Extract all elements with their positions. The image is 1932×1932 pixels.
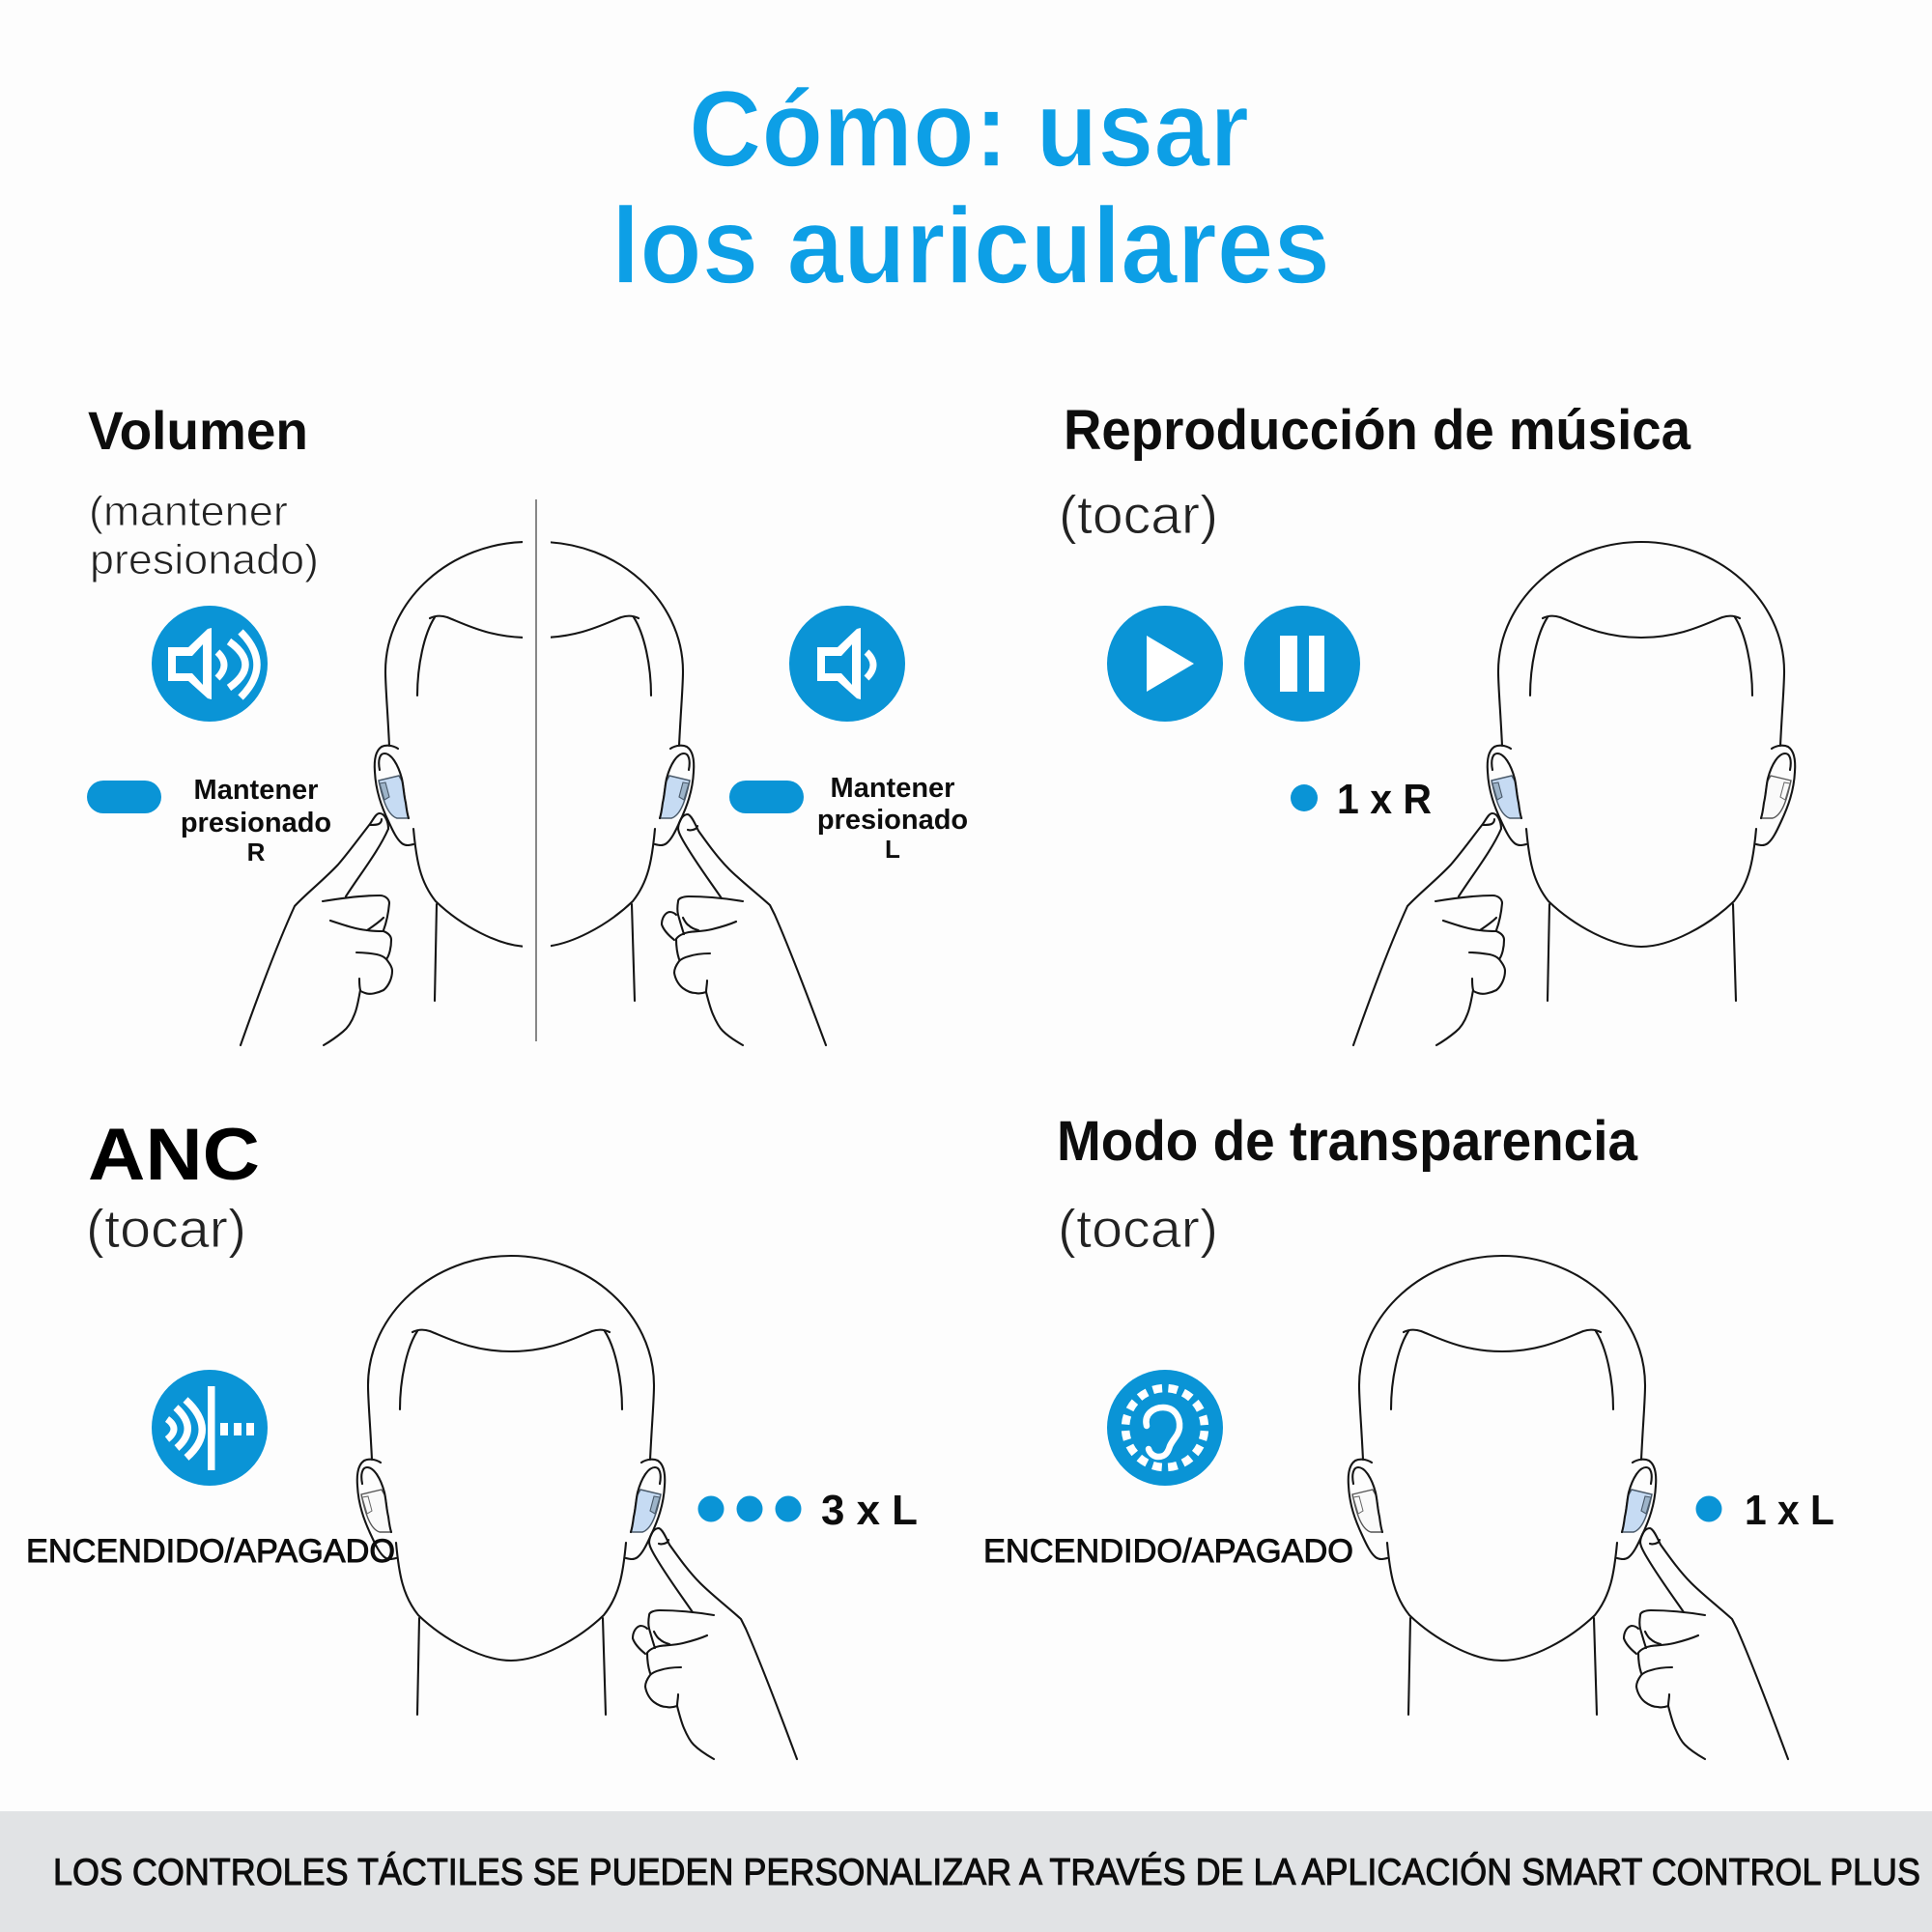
tap indicator: 3 x L [697, 1487, 918, 1534]
label: mantener presionado L: L [885, 835, 900, 864]
illustration: head with hand on left earbud [1349, 1256, 1788, 1759]
footer band [0, 1811, 1932, 1932]
note: tocar: (tocar) [86, 1198, 246, 1259]
panel: reproduccion de musica [1059, 399, 1795, 1045]
illustration: right half head with left hand [551, 541, 827, 1047]
label: mantener presionado L: presionado [817, 805, 968, 836]
heading: volumen: Volumen [88, 400, 308, 461]
title: los auriculares [611, 185, 1330, 306]
icon: noise cancelling [152, 1370, 268, 1486]
heading: modo de transparencia: Modo de transparencia [1057, 1110, 1638, 1173]
illustration: head with hand on left earbud [357, 1256, 797, 1759]
icon: volume up [152, 606, 268, 722]
long press pill: left [729, 781, 804, 813]
illustration: head with hand on right earbud [1353, 542, 1795, 1045]
panel: modo de transparencia [983, 1110, 1834, 1759]
tap indicator: 1 x L [1696, 1487, 1834, 1534]
note: tocar: (tocar) [1058, 1198, 1218, 1259]
tap indicator: 1 x R: 1 x R [1337, 776, 1432, 823]
label: encendido apagado: ENCENDIDO/APAGADO [983, 1533, 1353, 1570]
heading: ANC: ANC [88, 1114, 260, 1196]
icon: volume down [789, 606, 905, 722]
tap indicator: 1 x L: 1 x L [1745, 1487, 1834, 1534]
icon: pause [1244, 606, 1360, 722]
illustration: left half head with right hand [240, 541, 523, 1047]
icon: ear with dotted ring [1107, 1370, 1223, 1486]
panel: volumen [87, 400, 968, 1045]
title: Cómo: usar [689, 69, 1249, 189]
label: mantener presionado R: presionado [181, 808, 331, 838]
label: mantener presionado L: Mantener [831, 773, 954, 804]
note: mantener presionado: presionado) [90, 536, 319, 583]
panel: ANC [26, 1114, 918, 1759]
heading: reproduccion de musica: Reproducción de música [1064, 399, 1691, 462]
long press pill: right [87, 781, 161, 813]
label: encendido apagado: ENCENDIDO/APAGADO [26, 1533, 395, 1570]
title [611, 69, 1330, 306]
tap indicator: 1 x R [1291, 776, 1432, 823]
note: tocar: (tocar) [1059, 484, 1218, 545]
tap indicator: 3 x L: 3 x L [821, 1487, 918, 1534]
label: mantener presionado R: R [247, 838, 266, 867]
label: mantener presionado R: Mantener [194, 775, 318, 806]
divider between head halves [535, 499, 537, 1041]
icon: play [1107, 606, 1223, 722]
note: mantener presionado: (mantener [89, 488, 288, 535]
